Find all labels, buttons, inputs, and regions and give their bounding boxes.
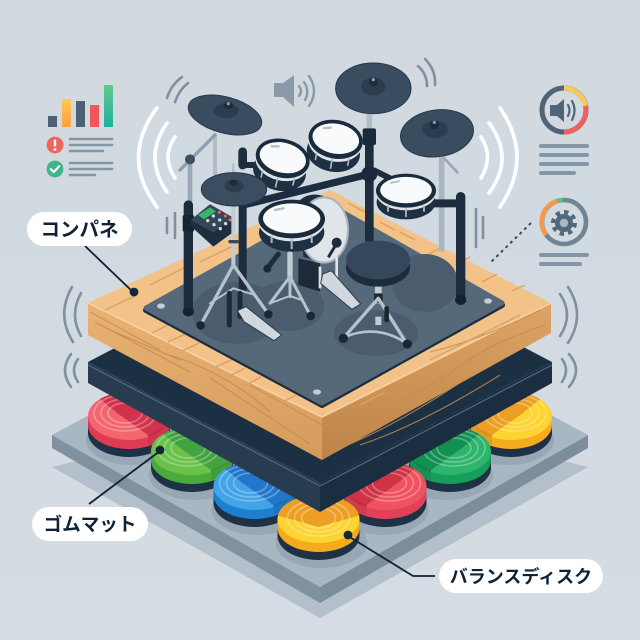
icon: speaker ring	[542, 88, 586, 132]
text lines	[70, 139, 112, 175]
left cymbal stand	[180, 135, 215, 205]
disc: green right	[400, 417, 500, 500]
disc: blue	[204, 452, 304, 535]
hi-hat stand	[196, 205, 273, 330]
kick pedal	[321, 271, 361, 309]
icon: warning	[47, 137, 63, 153]
rear left post lower	[231, 197, 255, 292]
sound waves: white left	[138, 108, 175, 207]
icon: speaker top	[274, 75, 314, 107]
disc: yellow centre	[268, 485, 368, 568]
rack left post	[183, 205, 194, 316]
callout: バランスディスク: バランスディスク	[450, 566, 592, 587]
drum pad: back left	[248, 133, 314, 197]
callout: バランスディスク	[344, 531, 603, 593]
drum pad: right	[376, 174, 436, 219]
bar chart	[48, 85, 113, 127]
text lines	[541, 255, 587, 264]
icon panel: sound and settings	[491, 88, 587, 264]
plywood board	[88, 190, 551, 460]
vibration marks	[64, 59, 577, 387]
base floor slab	[52, 290, 588, 618]
drum pad: snare	[258, 200, 325, 252]
centre rack post	[363, 113, 376, 242]
sound module	[191, 204, 233, 247]
rubber mat	[88, 240, 552, 512]
callout: コンパネ	[27, 212, 138, 296]
kick drum	[298, 195, 348, 292]
dotted leader	[491, 223, 531, 262]
callout: コンパネ: コンパネ	[40, 219, 119, 241]
rack crossbar	[243, 166, 377, 205]
icon: gear ring	[542, 200, 586, 244]
callout: ゴムマット	[32, 446, 164, 541]
cymbal: right	[397, 105, 477, 162]
callout: ゴムマット: ゴムマット	[44, 514, 136, 535]
right cymbal pole	[442, 157, 458, 252]
text lines	[541, 146, 587, 173]
mat screws	[157, 298, 492, 395]
drum pad: back right	[303, 116, 366, 176]
right rack post	[373, 170, 466, 305]
cymbal: top	[336, 63, 411, 114]
snare stand	[263, 253, 315, 320]
electronic drum kit	[180, 63, 477, 349]
cymbal: left	[184, 88, 266, 142]
disc: green left	[142, 417, 242, 500]
mat shadows	[192, 254, 458, 356]
cymbal: hi-hat	[201, 163, 267, 206]
sound waves: white right	[481, 108, 517, 207]
rear post	[240, 152, 260, 165]
hi-hat pedal	[237, 307, 282, 341]
disc: yellow right	[461, 382, 561, 465]
throne stool	[339, 241, 412, 349]
drum floor mat	[146, 205, 502, 405]
balance discs	[79, 382, 561, 568]
illustration: soundproof drum platform	[27, 58, 603, 618]
disc: red right	[336, 452, 436, 535]
icon panel: bar chart and status	[47, 85, 113, 177]
icon: check	[47, 161, 63, 177]
disc: red left	[79, 382, 179, 465]
